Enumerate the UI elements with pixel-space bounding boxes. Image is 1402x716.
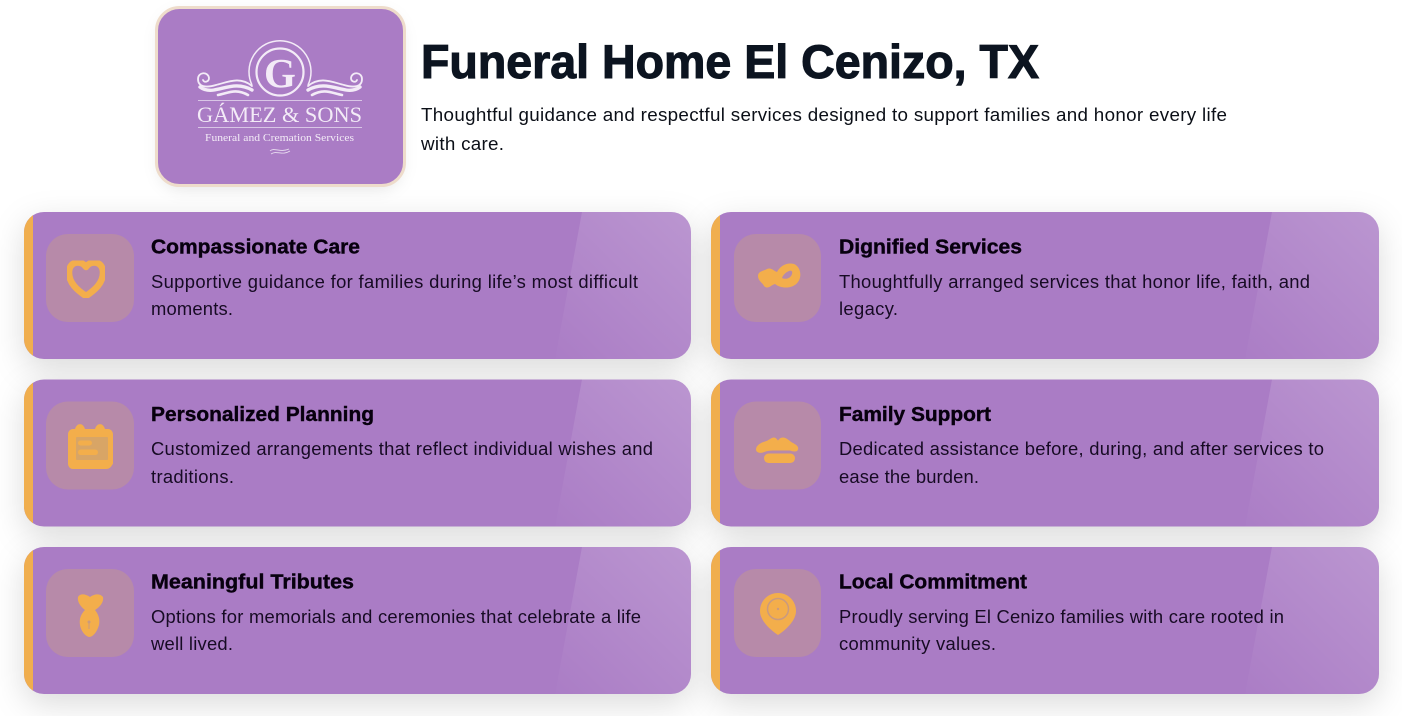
description: Customized arrangements that reflect individual wishes and xyxy=(151,438,653,459)
description: moments. xyxy=(151,298,233,319)
heading: Personalized Planning xyxy=(151,403,374,426)
heading: Local Commitment xyxy=(839,570,1027,594)
icon: hands xyxy=(756,438,798,463)
description: community values. xyxy=(839,633,996,654)
icon: ribbon xyxy=(758,263,800,288)
icon: heart xyxy=(69,262,103,296)
panel: Dignified Services xyxy=(711,212,1379,360)
description xyxy=(839,606,1284,654)
description xyxy=(839,271,1310,319)
description: ease the burden. xyxy=(839,466,979,487)
description: Proudly serving El Cenizo families with care rooted in xyxy=(839,606,1284,627)
title: Funeral Home El Cenizo, TX xyxy=(421,36,1039,89)
description xyxy=(151,438,653,487)
panel: Compassionate Care xyxy=(24,212,691,360)
description: well lived. xyxy=(150,633,233,654)
logo emblem: G monogram in rings: G xyxy=(264,50,296,96)
description: Thoughtfully arranged services that honor life, faith, and xyxy=(839,271,1310,292)
icon: calendar xyxy=(68,424,113,469)
description xyxy=(151,271,638,319)
description: Dedicated assistance before, during, and after services to xyxy=(839,438,1324,459)
heading: Compassionate Care xyxy=(151,236,360,258)
heading: Meaningful Tributes xyxy=(151,570,354,594)
panel: Family Support xyxy=(711,380,1379,527)
panel: Personalized Planning xyxy=(24,380,691,527)
panel: Meaningful Tributes xyxy=(24,547,691,694)
heading: Family Support xyxy=(839,403,991,426)
description: Supportive guidance for families during life’s most difficult xyxy=(151,271,638,292)
logo flourishes xyxy=(198,73,362,95)
subtitle xyxy=(420,104,1227,154)
panel: Local Commitment xyxy=(711,547,1379,694)
icon: flower xyxy=(78,594,103,637)
description: legacy. xyxy=(839,298,898,319)
heading: Dignified Services xyxy=(839,236,1022,258)
logo emblem: G monogram in rings xyxy=(249,41,311,96)
description: Options for memorials and ceremonies that celebrate a life xyxy=(151,606,641,627)
subtitle: Thoughtful guidance and respectful services designed to support families and honor every life xyxy=(421,104,1227,125)
icon: map pin xyxy=(760,593,796,635)
description xyxy=(839,438,1324,487)
logo name: GÁMEZ & SONS xyxy=(197,102,362,127)
logo badge xyxy=(156,8,404,186)
logo tagline: Funeral and Cremation Services xyxy=(205,132,354,144)
description: traditions. xyxy=(151,466,234,487)
subtitle: with care. xyxy=(420,133,504,154)
description xyxy=(150,606,641,654)
